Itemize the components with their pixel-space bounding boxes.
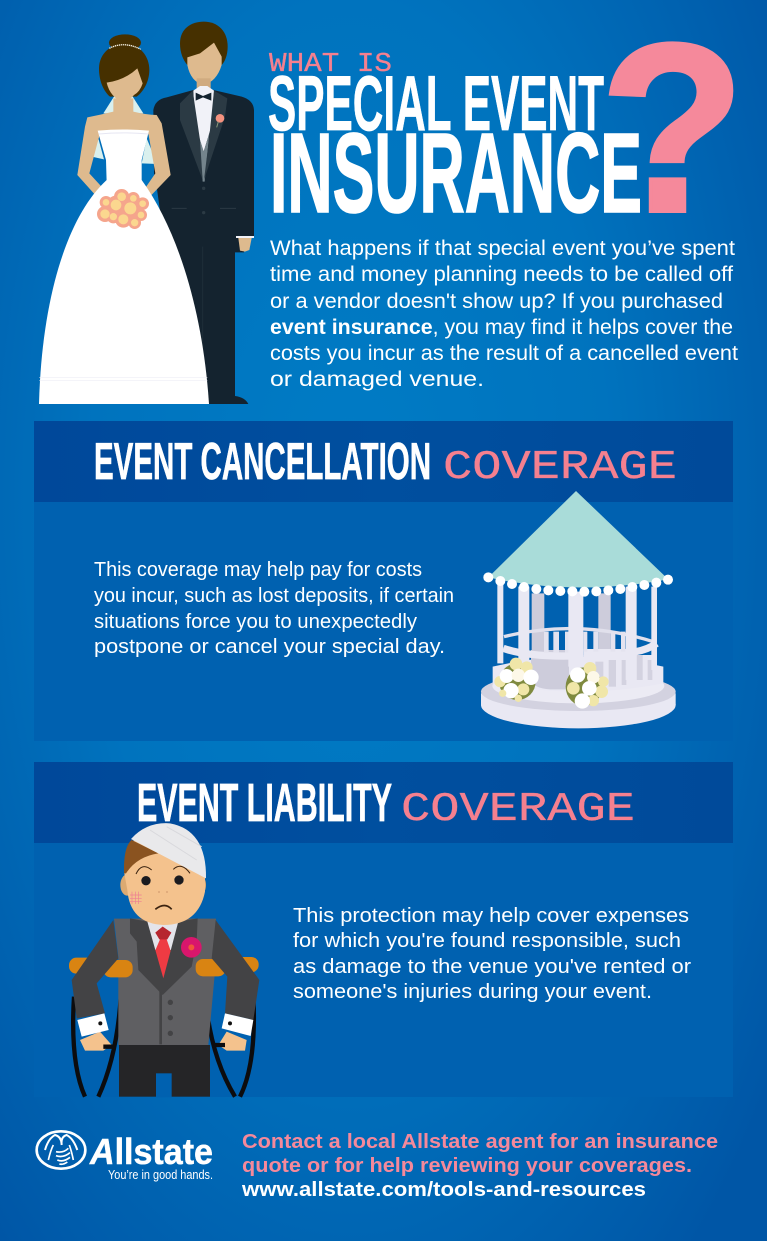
intro text block: or a vendor doesn't show up? If you purchased [270, 290, 723, 313]
intro text block [270, 237, 738, 391]
icon: good hands [37, 1131, 85, 1169]
illustration: bride and groom [39, 22, 254, 404]
illustration: gazebo [481, 491, 676, 728]
body text: liability: someone's injuries during your event. [293, 981, 652, 1003]
heading: event liability: EVENT LIABILITY [137, 773, 392, 833]
panel: event cancellation coverage [34, 421, 733, 741]
body text: cancellation: you incur, such as lost deposits, if certain [94, 585, 454, 607]
footer call to action: www.allstate.com/tools-and-resources [241, 1179, 646, 1201]
body text: cancellation [94, 559, 454, 658]
tagline: You’re in good hands. [108, 1168, 213, 1182]
bride [39, 34, 209, 404]
body text: cancellation: This coverage may help pay for costs [94, 559, 422, 581]
heading: coverage: COVERAGE [443, 445, 677, 491]
groom [153, 22, 254, 404]
footer call to action: quote or for help reviewing your coverages. [242, 1155, 692, 1177]
illustration: injured groom on crutches [69, 823, 259, 1097]
panel: event liability coverage [34, 762, 733, 1097]
heading: event cancellation: EVENT CANCELLATION [94, 433, 431, 491]
footer call to action: Contact a local Allstate agent for an insurance [242, 1131, 718, 1153]
body text: liability: as damage to the venue you've rented or [293, 956, 691, 978]
heading: what is: WHAT IS [269, 50, 392, 80]
body text: liability: This protection may help cover expenses [293, 905, 689, 927]
body text: liability [293, 905, 691, 1003]
footer call to action [241, 1131, 718, 1201]
intro text block: What happens if that special event you’ve spent [270, 237, 735, 260]
intro text block: costs you incur as the result of a cancelled event [270, 342, 738, 365]
body text: liability: for which you're found responsible, such [293, 930, 681, 952]
intro text block: or damaged venue. [270, 368, 484, 391]
wordmark: Allstate [89, 1131, 213, 1172]
logo: allstate [37, 1131, 213, 1182]
intro text block: event insurance, you may find it helps cover the [270, 316, 733, 339]
intro text block: time and money planning needs to be called off [270, 263, 733, 286]
icon: question mark: ? [600, 0, 745, 262]
body text: cancellation: postpone or cancel your special day. [94, 636, 445, 658]
body text: cancellation: situations force you to unexpectedly [94, 611, 417, 633]
heading: coverage: COVERAGE [401, 787, 635, 833]
